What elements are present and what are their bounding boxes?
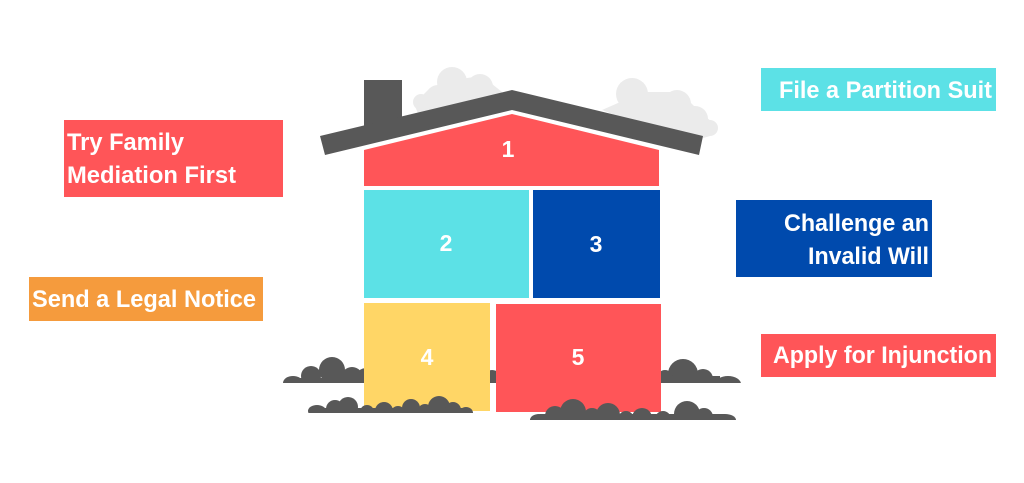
- background cloud: right of roof: [602, 78, 718, 142]
- section 4: 4: [421, 344, 434, 370]
- section 2: 2: [440, 230, 452, 256]
- label: Try Family Mediation First: Mediation First: [67, 162, 236, 189]
- ground clouds behind the house: [283, 357, 741, 383]
- chimney and roof: [320, 80, 703, 155]
- label: Apply for Injunction: Apply for Injunction: [773, 342, 992, 369]
- section 1: gable: 1: [502, 136, 515, 162]
- ground cloud: front left: [308, 396, 473, 413]
- section 2: [364, 190, 529, 298]
- ground cloud: front right: [530, 399, 736, 420]
- infographic canvas: [29, 67, 996, 420]
- label: File a Partition Suit: [761, 68, 996, 111]
- section 3: [533, 190, 660, 298]
- section 4: [364, 303, 490, 411]
- house: [364, 114, 661, 412]
- label: Try Family Mediation First: Try Family: [67, 129, 185, 156]
- section 5: 5: [572, 344, 585, 370]
- section 5: [496, 304, 661, 412]
- section 3: 3: [590, 231, 602, 257]
- label: Challenge an Invalid Will: Challenge an: [784, 210, 929, 237]
- label: Apply for Injunction: [761, 334, 996, 377]
- section 1: gable: [364, 114, 659, 186]
- label: Challenge an Invalid Will: Invalid Will: [808, 243, 929, 270]
- label: Try Family Mediation First: [64, 120, 283, 197]
- label: Send a Legal Notice: Send a Legal Notice: [32, 286, 256, 313]
- label: Challenge an Invalid Will: [736, 200, 932, 277]
- label: File a Partition Suit: File a Partition Suit: [779, 77, 992, 104]
- label: Send a Legal Notice: [29, 277, 263, 321]
- background cloud: left of roof: [413, 67, 502, 118]
